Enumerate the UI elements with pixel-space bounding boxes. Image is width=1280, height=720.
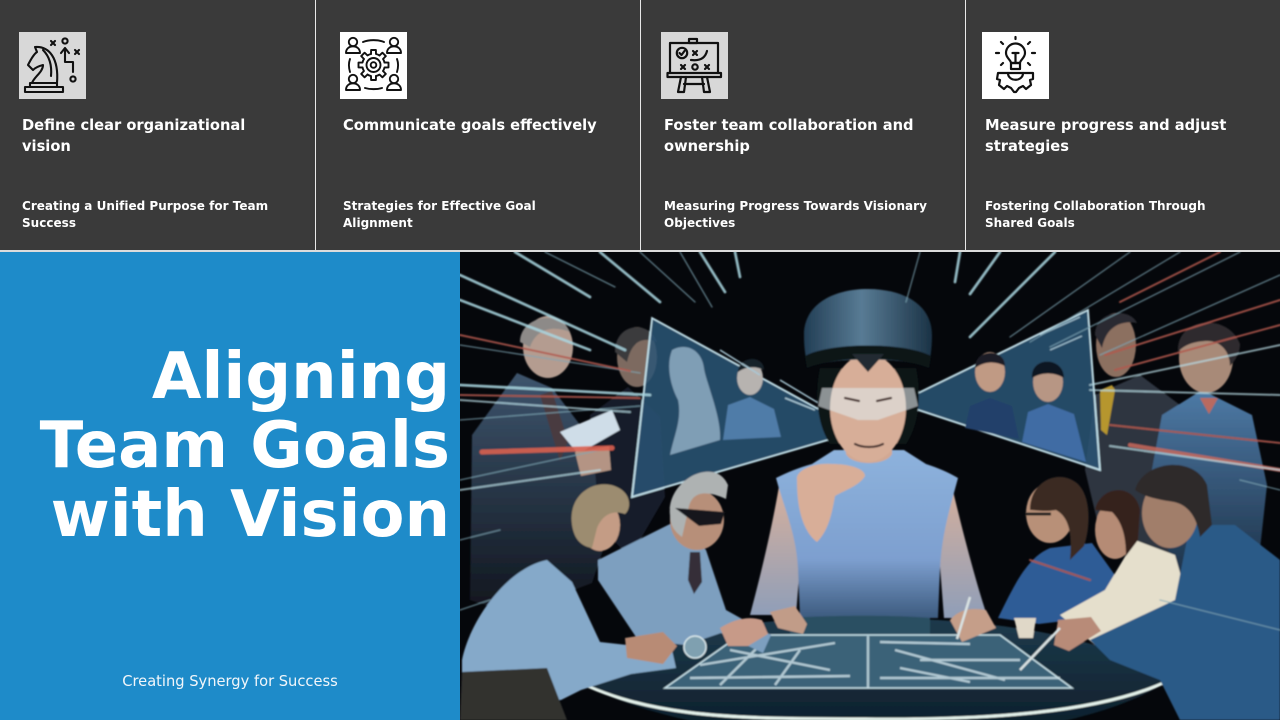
subtitle: Creating Synergy for Success	[122, 673, 338, 690]
heading: team collaboration	[664, 117, 914, 155]
heading: measure progress	[985, 117, 1226, 155]
title	[40, 340, 450, 552]
icon: chess knight strategy	[19, 32, 86, 99]
heading: team collaboration: Foster team collaboration and	[664, 117, 914, 134]
subheading: unified purpose	[22, 199, 268, 230]
illustration: team around holographic table	[460, 252, 1280, 720]
title: Aligning	[152, 340, 450, 414]
table with blueprint	[560, 616, 1170, 720]
heading: measure progress: strategies	[985, 138, 1069, 155]
seated colleagues right	[950, 465, 1280, 720]
light streaks	[460, 252, 1280, 630]
subheading: shared goals	[985, 199, 1206, 230]
subheading: goal alignment	[343, 199, 536, 230]
subheading: measuring progress	[664, 199, 927, 230]
heading: define vision: vision	[22, 138, 71, 155]
subheading: shared goals: Shared Goals	[985, 216, 1075, 230]
icon: gear and team	[340, 32, 407, 99]
standing colleagues left	[470, 316, 665, 613]
subheading: measuring progress: Measuring Progress Towards Visionary	[664, 199, 927, 213]
heading: communicate goals: Communicate goals effectively	[343, 117, 597, 134]
title: with Vision	[51, 478, 450, 552]
holographic panel right	[912, 310, 1100, 470]
standing colleagues right	[1085, 313, 1267, 595]
subheading: measuring progress: Objectives	[664, 216, 735, 230]
heading: define vision: Define clear organizational	[22, 117, 245, 134]
panel: top strip of four goals	[0, 0, 1280, 252]
central woman with helmet	[750, 289, 988, 618]
title: Team Goals	[40, 409, 450, 483]
subheading: goal alignment: Strategies for Effective Goal	[343, 199, 536, 213]
subheading: goal alignment: Alignment	[343, 216, 413, 230]
panel: blue title block	[0, 252, 460, 720]
background	[460, 252, 1280, 720]
subheading: unified purpose: Success	[22, 216, 76, 230]
subheading: shared goals: Fostering Collaboration Through	[985, 199, 1206, 213]
holographic panel left	[632, 318, 835, 497]
heading: measure progress: Measure progress and adjust	[985, 117, 1226, 134]
heading: team collaboration: ownership	[664, 138, 750, 155]
icon: light bulb and gear	[982, 32, 1049, 99]
heading: define vision	[22, 117, 245, 155]
seated colleagues left	[460, 472, 807, 720]
subheading: unified purpose: Creating a Unified Purpose for Team	[22, 199, 268, 213]
icon: strategy whiteboard	[661, 32, 728, 99]
